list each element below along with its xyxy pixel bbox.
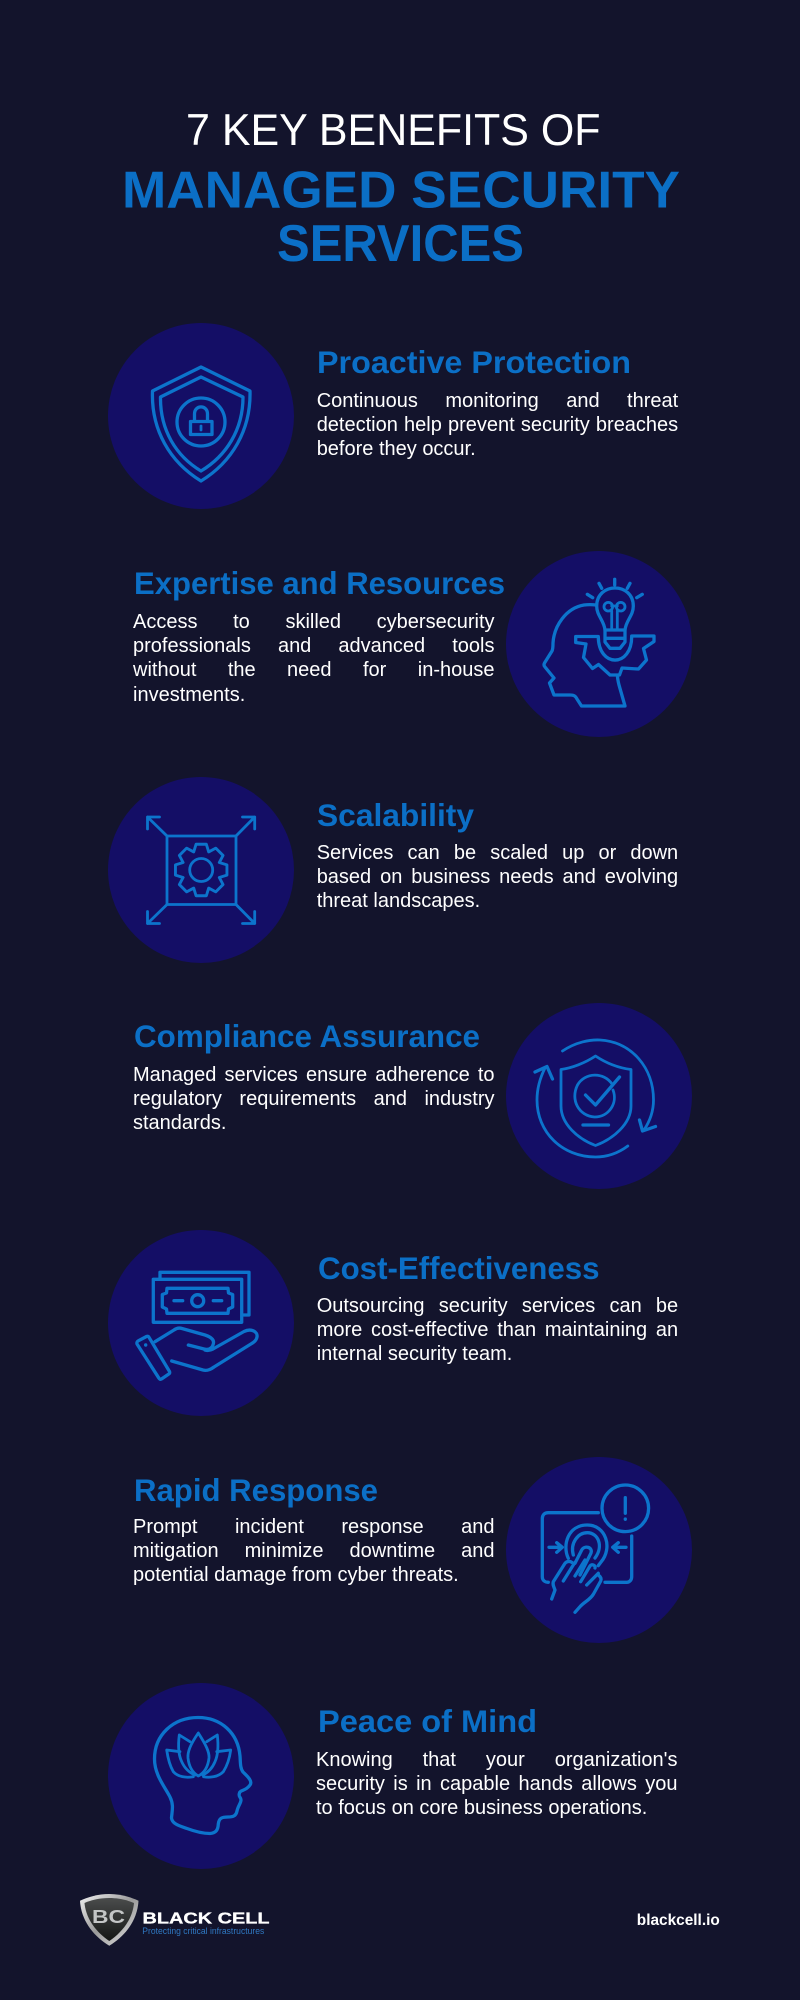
body text <box>317 1295 678 1365</box>
icon: shield with padlock <box>108 323 294 509</box>
body text: before they occur. <box>317 438 476 460</box>
title line: services: SERVICES <box>277 214 524 272</box>
icon: finger pressing alert button <box>506 1457 692 1643</box>
body text <box>133 1516 494 1586</box>
body text <box>133 1064 494 1134</box>
icon: head with lotus <box>108 1683 294 1869</box>
body text <box>317 842 678 912</box>
icon: hand holding money <box>108 1230 294 1416</box>
body text: Prompt incident response and <box>133 1516 494 1538</box>
body text: threat landscapes. <box>317 890 480 912</box>
panel: peace of mind <box>108 1683 678 1869</box>
body text <box>317 390 678 460</box>
body text: regulatory requirements and industry <box>133 1088 494 1110</box>
body text: to focus on core business operations. <box>316 1797 647 1819</box>
body text: standards. <box>133 1112 226 1134</box>
body text: Continuous monitoring and threat <box>317 390 678 412</box>
body text: Services can be scaled up or down <box>317 842 678 864</box>
heading: Rapid Response <box>134 1472 378 1508</box>
body text: more cost-effective than maintaining an <box>317 1319 678 1341</box>
body text: Access to skilled cybersecurity <box>133 611 494 633</box>
website url: blackcell.io <box>637 1912 720 1929</box>
body text: detection help prevent security breaches <box>317 414 678 436</box>
icon: shield check with cycle arrows <box>506 1003 692 1189</box>
body text: professionals and advanced tools <box>133 635 494 657</box>
body text: investments. <box>133 684 245 706</box>
panel: proactive protection <box>108 323 678 509</box>
icon: gear in expanding square <box>108 777 294 963</box>
icon: shield emblem: BC <box>92 1907 125 1927</box>
icon: shield emblem <box>80 1894 138 1946</box>
heading: Expertise and Resources <box>134 565 505 601</box>
heading: Peace of Mind <box>318 1703 537 1739</box>
body text: Knowing that your organization's <box>316 1749 678 1771</box>
body text: Outsourcing security services can be <box>317 1295 678 1317</box>
body text: Managed services ensure adherence to <box>133 1064 494 1086</box>
body text <box>316 1749 678 1819</box>
panel: cost-effectiveness <box>108 1230 678 1416</box>
panel: expertise and resources <box>133 551 692 737</box>
body text: mitigation minimize downtime and <box>133 1540 494 1562</box>
title line: 7 key benefits of: 7 KEY BENEFITS OF <box>186 106 600 155</box>
body text: internal security team. <box>317 1343 512 1365</box>
heading: Scalability <box>317 797 474 833</box>
icon: head with light bulb <box>506 551 692 737</box>
heading: Proactive Protection <box>317 344 631 380</box>
body text: potential damage from cyber threats. <box>133 1564 459 1586</box>
heading: Compliance Assurance <box>134 1018 480 1054</box>
body text: based on business needs and evolving <box>317 866 678 888</box>
logo: black cell <box>80 1894 270 1946</box>
title line: managed security: MANAGED SECURITY <box>122 160 680 218</box>
body text: security is in capable hands allows you <box>316 1773 678 1795</box>
body text <box>133 611 494 706</box>
brand name: BLACK CELL <box>142 1910 270 1928</box>
body text: without the need for in-house <box>133 659 494 681</box>
tagline: Protecting critical infrastructures <box>142 1926 265 1936</box>
panel: compliance assurance <box>133 1003 692 1189</box>
heading: Cost-Effectiveness <box>318 1250 599 1286</box>
panel: scalability <box>108 777 678 963</box>
panel: rapid response <box>133 1457 692 1643</box>
title <box>122 106 680 272</box>
